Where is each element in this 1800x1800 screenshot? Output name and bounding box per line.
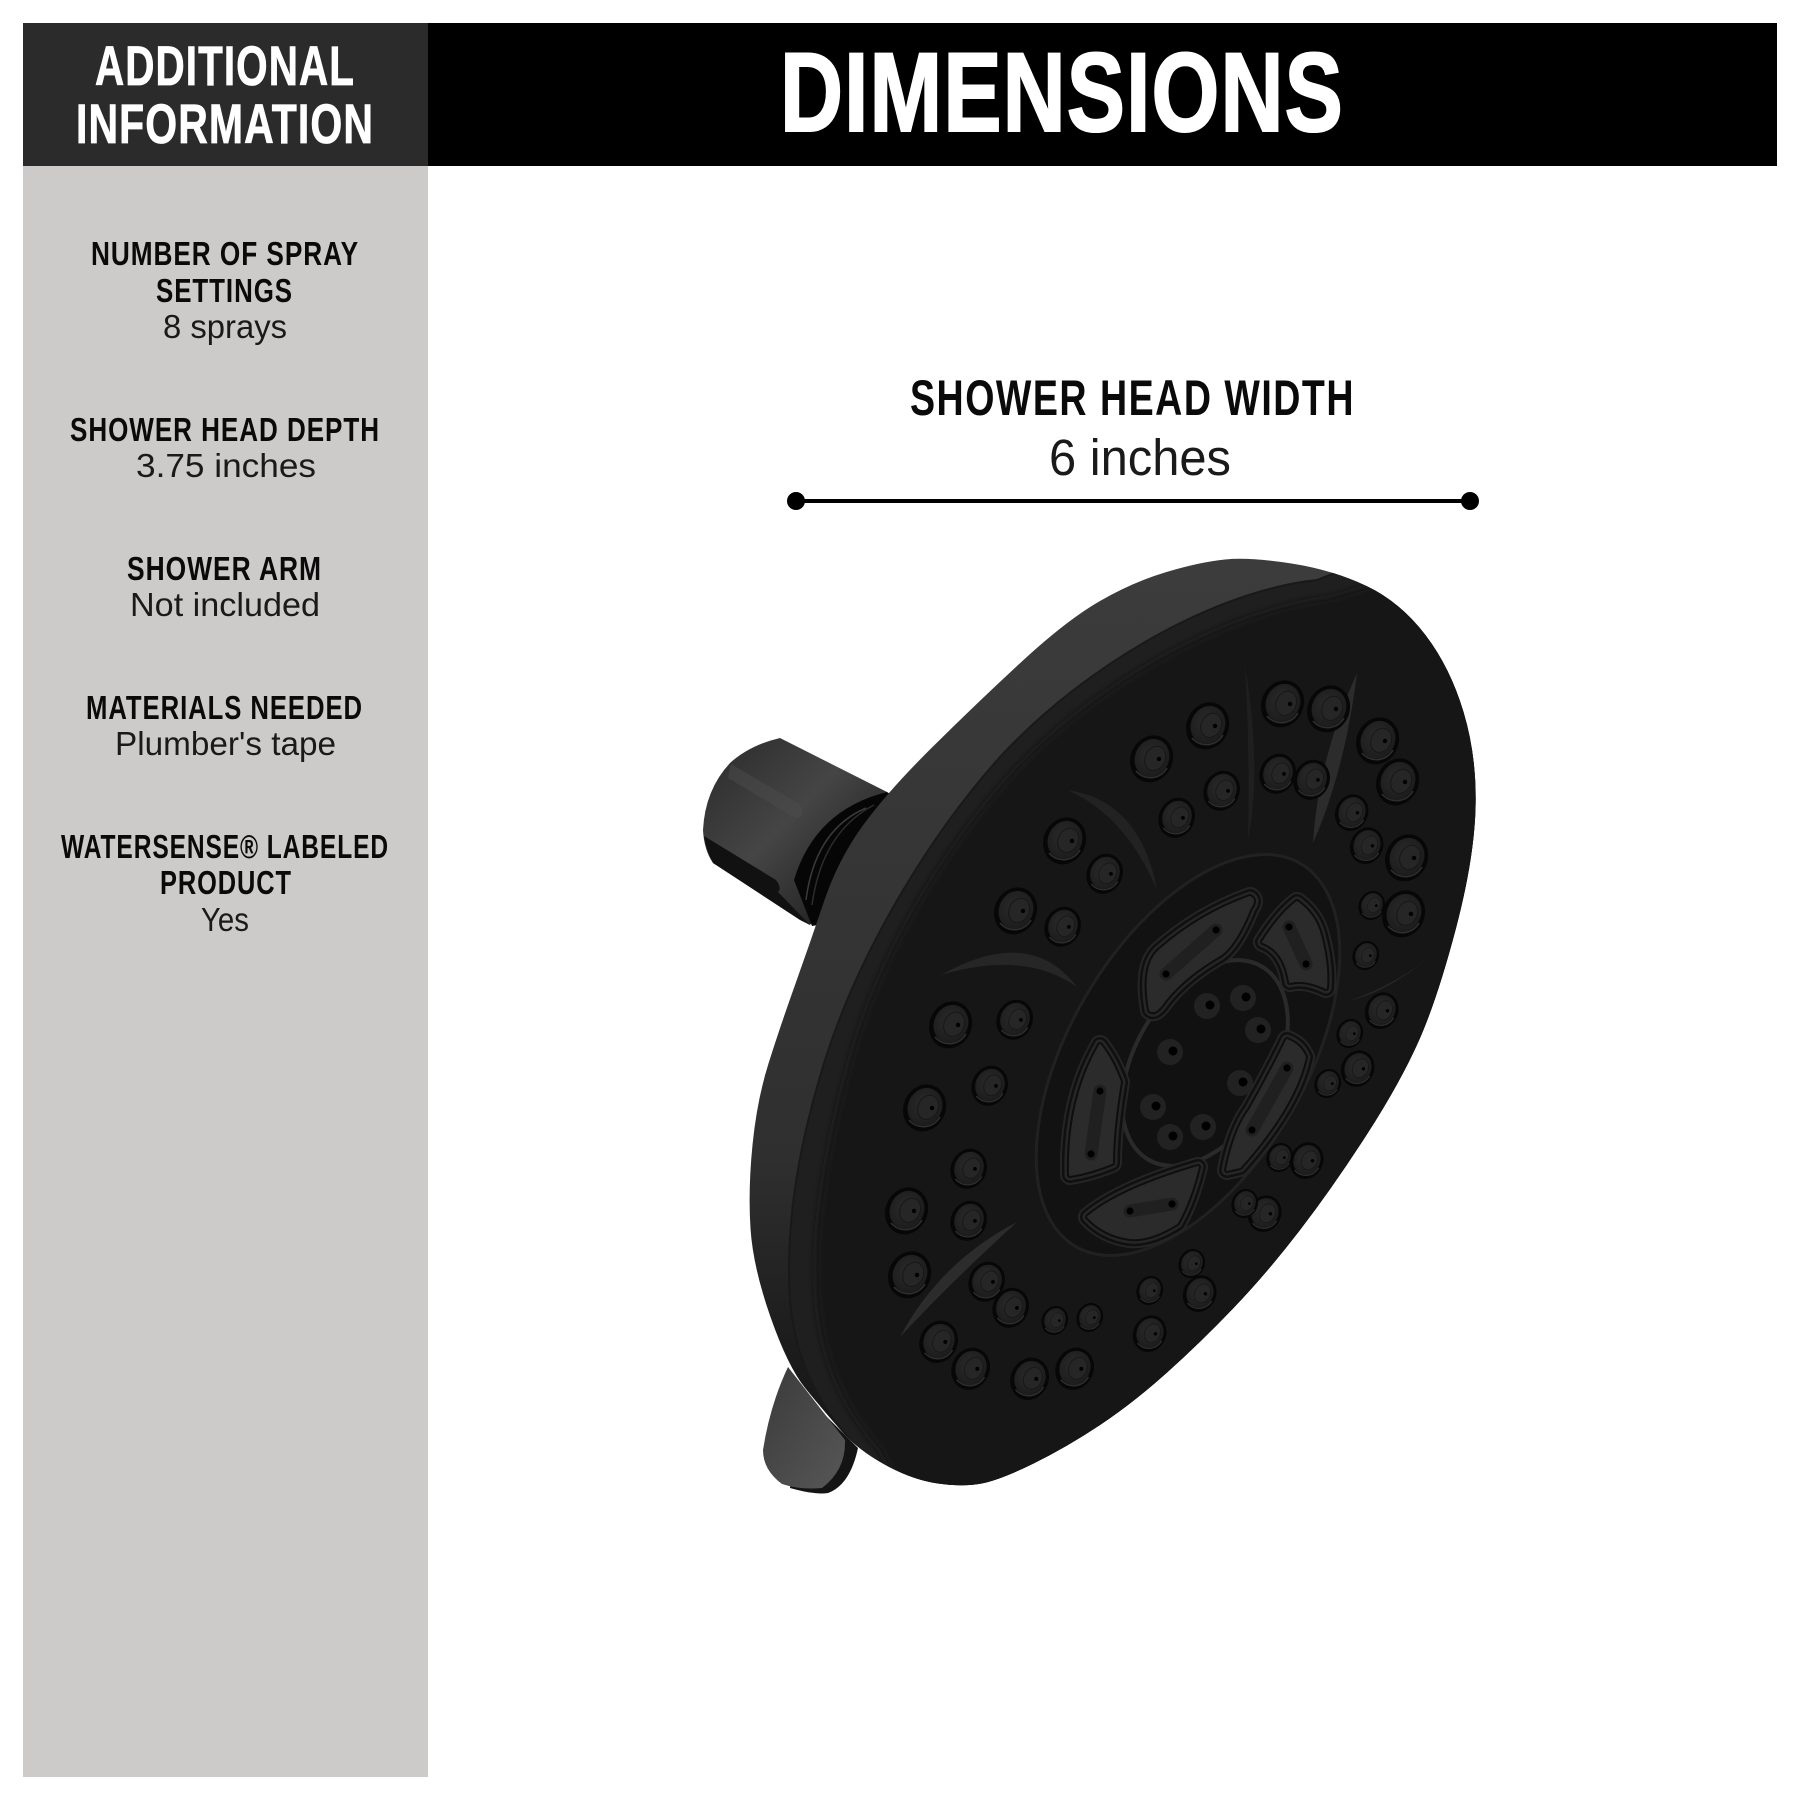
panel: additional information list xyxy=(23,166,428,1777)
face swoosh highlights xyxy=(900,665,1428,1337)
head rim xyxy=(750,559,1476,1485)
spec: watersense labeled product xyxy=(61,828,389,938)
center jets xyxy=(1140,985,1271,1150)
panel: dimensions header xyxy=(428,23,1777,166)
segment inner slots xyxy=(1091,927,1306,1211)
segment jet holes xyxy=(1087,923,1310,1215)
lever xyxy=(763,1367,858,1493)
spec: number of spray settings: 8 sprays xyxy=(163,308,287,345)
dimension line: shower head width xyxy=(787,492,1479,510)
head face xyxy=(788,572,1476,1486)
spec: shower head depth: SHOWER HEAD DEPTH xyxy=(70,411,380,448)
heading: dimensions: DIMENSIONS xyxy=(780,30,1344,155)
center spray segments xyxy=(1070,897,1326,1238)
shower head width label: SHOWER HEAD WIDTH xyxy=(910,370,1355,426)
spec: shower arm: Not included xyxy=(130,586,320,623)
shower head width label xyxy=(910,370,1355,486)
spec: watersense labeled product: WATERSENSE® LABELED xyxy=(61,828,389,865)
center spray recess xyxy=(974,804,1402,1306)
heading: additional information: INFORMATION xyxy=(76,92,374,155)
spec: shower head depth: 3.75 inches xyxy=(136,447,316,484)
shower arm connector knob xyxy=(703,738,900,926)
spec: materials needed: MATERIALS NEEDED xyxy=(86,689,363,726)
outer large nozzles xyxy=(877,673,1436,1406)
spec: number of spray settings: SETTINGS xyxy=(156,272,293,309)
spec: number of spray settings: NUMBER OF SPRAY xyxy=(91,235,359,272)
spec: number of spray settings xyxy=(91,235,359,345)
spec: watersense labeled product: Yes xyxy=(201,901,249,938)
panel: additional information header xyxy=(23,23,428,166)
spec: shower arm: SHOWER ARM xyxy=(127,550,322,587)
product image: shower head xyxy=(703,558,1476,1494)
spec: materials needed: Plumber's tape xyxy=(115,725,336,762)
shower head width label: 6 inches xyxy=(1049,429,1231,486)
heading: additional information xyxy=(76,34,374,155)
outer small nozzles xyxy=(1037,887,1390,1340)
spec: watersense labeled product: PRODUCT xyxy=(160,864,292,901)
spec: materials needed xyxy=(86,689,363,762)
spec: shower arm xyxy=(127,550,322,623)
heading: additional information: ADDITIONAL xyxy=(95,34,355,97)
outer medium nozzles xyxy=(944,748,1404,1358)
spec: shower head depth xyxy=(70,411,380,484)
